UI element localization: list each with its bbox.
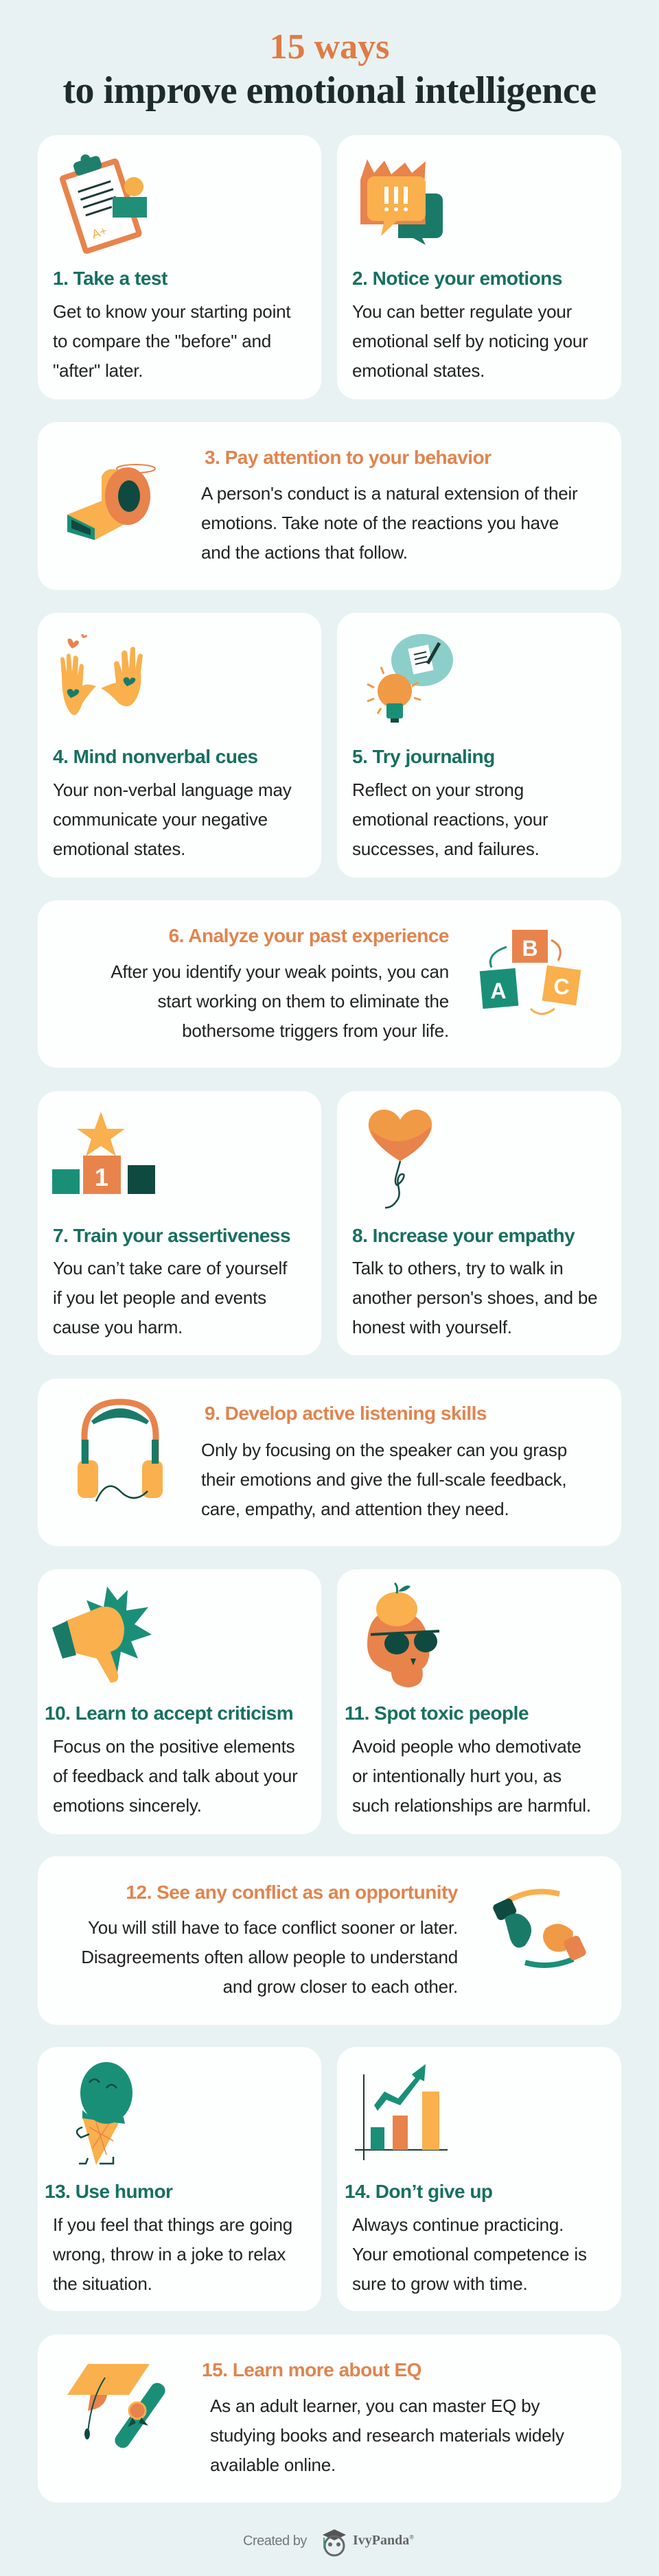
icon: clipboard: A+ bbox=[90, 224, 109, 242]
icon: clipboard bbox=[59, 154, 147, 254]
icon: ABC blocks: A bbox=[490, 979, 507, 1003]
text: honest with yourself. bbox=[352, 1317, 512, 1337]
panel: 13 humor bbox=[38, 2047, 321, 2311]
icon: thumbs down burst bbox=[52, 1586, 152, 1683]
panel: 11 toxic people bbox=[337, 1569, 621, 1834]
text: Avoid people who demotivate bbox=[352, 1736, 581, 1757]
heading: 15. Learn more about EQ bbox=[202, 2359, 421, 2380]
text bbox=[53, 780, 292, 859]
panel: 2 notice emotions bbox=[337, 135, 621, 399]
panel: 4 nonverbal bbox=[38, 613, 321, 878]
text: cause you harm. bbox=[53, 1317, 183, 1337]
panel: 10 criticism bbox=[38, 1569, 321, 1834]
text: emotional self by noticing your bbox=[352, 331, 588, 351]
text bbox=[53, 1736, 298, 1816]
heading: 11. Spot toxic people bbox=[345, 1702, 529, 1724]
icon: podium with star bbox=[52, 1112, 155, 1194]
text: sure to grow with time. bbox=[352, 2273, 527, 2294]
text: emotional reactions, your bbox=[352, 809, 548, 830]
text: You will still have to face conflict sooner or later. bbox=[88, 1917, 458, 1938]
icon: skull with apple and sunglasses bbox=[367, 1582, 439, 1687]
text: studying books and research materials widely bbox=[210, 2425, 564, 2446]
text: or intentionally hurt you, as bbox=[352, 1766, 562, 1786]
title: 15 ways bbox=[270, 27, 389, 67]
icon: heart balloon bbox=[368, 1110, 432, 1209]
text: such relationships are harmful. bbox=[352, 1795, 591, 1816]
text: care, empathy, and attention they need. bbox=[201, 1499, 509, 1519]
text: You can’t take care of yourself bbox=[53, 1258, 287, 1278]
heading: 1. Take a test bbox=[53, 268, 167, 289]
icon: hands with hearts bbox=[60, 634, 143, 715]
text: to compare the "before" and bbox=[53, 331, 271, 351]
footer: created by IvyPanda bbox=[243, 2529, 414, 2557]
heading: 3. Pay attention to your behavior bbox=[205, 447, 492, 468]
text: successes, and failures. bbox=[352, 839, 540, 859]
panel: 7 assertiveness bbox=[38, 1091, 321, 1355]
panel: 1 take a test bbox=[38, 135, 321, 399]
text bbox=[352, 301, 588, 381]
icon: ABC blocks bbox=[479, 930, 581, 1015]
text: their emotions and give the full-scale feedback, bbox=[201, 1469, 566, 1490]
panel: 5 journaling bbox=[337, 613, 621, 878]
icon: podium with star: 1 bbox=[95, 1163, 108, 1191]
text bbox=[201, 1440, 567, 1519]
text: emotional states. bbox=[53, 839, 185, 859]
title bbox=[62, 27, 597, 112]
text: available online. bbox=[210, 2455, 336, 2475]
heading: 10. Learn to accept criticism bbox=[45, 1702, 293, 1724]
text: communicate your negative bbox=[53, 809, 268, 830]
text: Always continue practicing. bbox=[352, 2214, 564, 2235]
text: Get to know your starting point bbox=[53, 301, 290, 322]
text bbox=[81, 1917, 458, 1997]
text: emotions sincerely. bbox=[53, 1795, 202, 1816]
text bbox=[352, 2214, 587, 2294]
text: Disagreements often allow people to understand bbox=[81, 1947, 458, 1967]
text: A person's conduct is a natural extension of their bbox=[201, 483, 578, 504]
text: Talk to others, try to walk in bbox=[352, 1258, 564, 1278]
heading: 5. Try journaling bbox=[352, 746, 495, 767]
heading: 8. Increase your empathy bbox=[352, 1225, 575, 1246]
text bbox=[53, 1258, 287, 1337]
text: and grow closer to each other. bbox=[223, 1976, 458, 1997]
text bbox=[201, 483, 578, 563]
panel: 3 behavior bbox=[38, 422, 621, 590]
text bbox=[111, 961, 449, 1041]
text: of feedback and talk about your bbox=[53, 1766, 298, 1786]
text bbox=[352, 780, 548, 859]
text: start working on them to eliminate the bbox=[158, 991, 449, 1011]
text: After you identify your weak points, you can bbox=[111, 961, 449, 982]
text: and the actions that follow. bbox=[201, 542, 408, 563]
panel: 6 past experience bbox=[38, 900, 621, 1068]
text: Your emotional competence is bbox=[352, 2244, 587, 2264]
panel: 12 conflict bbox=[38, 1856, 621, 2025]
icon: whistle bbox=[67, 464, 156, 540]
heading: 14. Don’t give up bbox=[345, 2181, 493, 2202]
panel: 9 active listening bbox=[38, 1379, 621, 1546]
icon: graduation cap and diploma bbox=[67, 2364, 165, 2448]
text: Only by focusing on the speaker can you grasp bbox=[201, 1440, 567, 1460]
text: emotions. Take note of the reactions you have bbox=[201, 513, 559, 533]
icon: ABC blocks: C bbox=[553, 974, 570, 999]
text: emotional states. bbox=[352, 360, 485, 381]
text: if you let people and events bbox=[53, 1287, 266, 1308]
heading: 4. Mind nonverbal cues bbox=[53, 746, 258, 767]
panel: 14 don't give up bbox=[337, 2047, 621, 2311]
heading: 13. Use humor bbox=[45, 2181, 172, 2202]
footer: created by IvyPanda: IvyPanda® bbox=[353, 2533, 414, 2548]
text: Reflect on your strong bbox=[352, 780, 524, 800]
icon: headphones bbox=[78, 1398, 163, 1501]
text: the situation. bbox=[53, 2273, 152, 2294]
icon: ABC blocks: B bbox=[522, 936, 538, 961]
text: You can better regulate your bbox=[352, 301, 572, 322]
footer: created by IvyPanda: Created by bbox=[243, 2533, 307, 2549]
title: to improve emotional intelligence bbox=[62, 69, 597, 112]
icon: panda logo bbox=[323, 2529, 346, 2557]
icon: lightbulb with note bbox=[367, 634, 453, 723]
text: bothersome triggers from your life. bbox=[182, 1020, 449, 1041]
panel: 15 learn more bbox=[38, 2334, 621, 2503]
icon: laughing ice cream bbox=[76, 2062, 132, 2165]
heading: 6. Analyze your past experience bbox=[169, 925, 449, 946]
panel: 8 empathy bbox=[337, 1091, 621, 1355]
heading: 12. See any conflict as an opportunity bbox=[126, 1882, 458, 1903]
text bbox=[53, 2214, 292, 2294]
icon: boxing gloves bbox=[493, 1888, 586, 1968]
text bbox=[352, 1736, 591, 1816]
text: Your non-verbal language may bbox=[53, 780, 292, 800]
heading: 2. Notice your emotions bbox=[352, 268, 562, 289]
text: As an adult learner, you can master EQ by bbox=[210, 2396, 540, 2416]
heading: 7. Train your assertiveness bbox=[53, 1225, 290, 1246]
text: If you feel that things are going bbox=[53, 2214, 292, 2235]
text: another person's shoes, and be bbox=[352, 1287, 597, 1308]
icon: growth chart bbox=[355, 2064, 448, 2160]
text bbox=[53, 301, 291, 381]
text: Focus on the positive elements bbox=[53, 1736, 294, 1757]
text: wrong, throw in a joke to relax bbox=[53, 2244, 286, 2264]
text: "after" later. bbox=[53, 360, 143, 381]
icon: speech bubbles on fire bbox=[360, 159, 443, 245]
text bbox=[210, 2396, 564, 2475]
text bbox=[352, 1258, 597, 1337]
heading: 9. Develop active listening skills bbox=[205, 1403, 487, 1424]
